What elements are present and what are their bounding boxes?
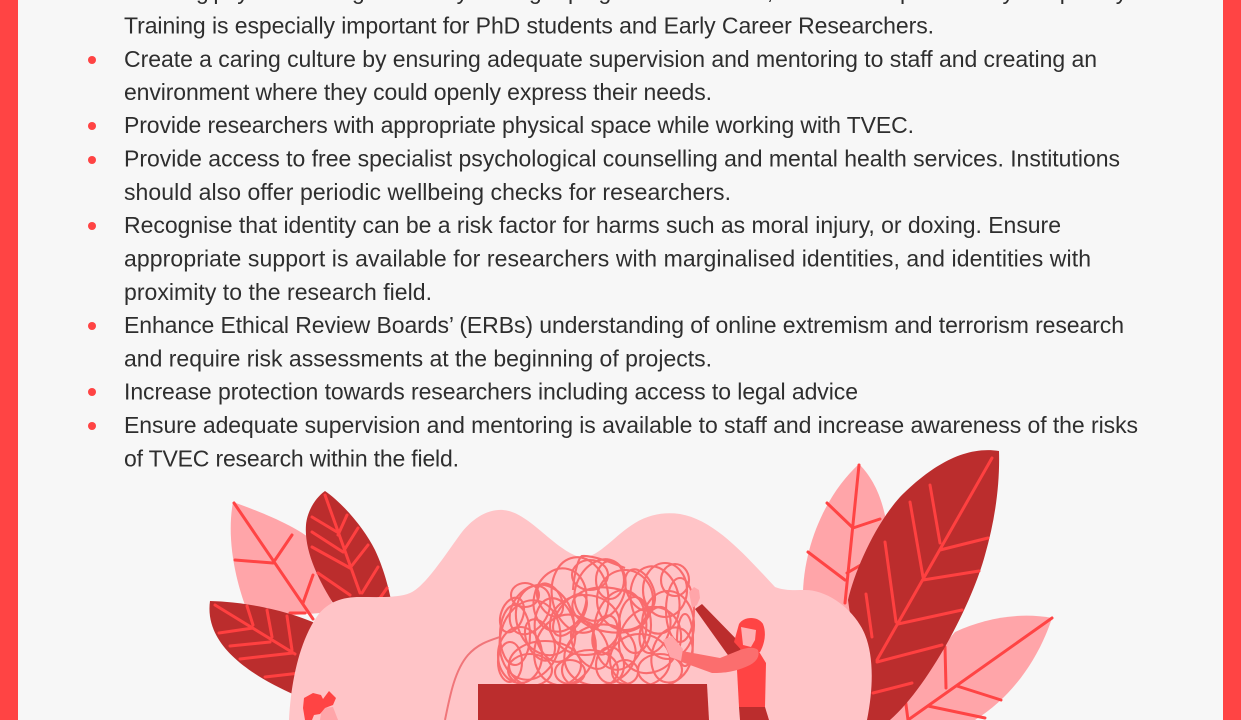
- leaf: large dark right: [848, 450, 999, 720]
- item: caring culture: environment where they could openly express their needs.: [124, 79, 712, 105]
- item: training (cropped top line): [124, 0, 1131, 38]
- background blob: [289, 510, 872, 720]
- leaf: light top right: [803, 464, 886, 612]
- face: [741, 627, 756, 647]
- item: identity risk: Recognise that identity can be a risk factor for harms such as moral injury, or doxing. Ensure: [124, 212, 1061, 238]
- right red border: [1223, 0, 1241, 720]
- item: supervision and awareness: Ensure adequate supervision and mentoring is available to staff and increase awareness of the risks: [124, 412, 1138, 438]
- item: counselling: Provide access to free specialist psychological counselling and mental health services. Institutions: [124, 146, 1120, 172]
- leaf: dark lower left: [209, 601, 315, 695]
- item: caring culture: Create a caring culture by ensuring adequate supervision and mentoring to staff and creating an: [124, 46, 1097, 72]
- recommendations list: [88, 0, 1138, 471]
- item: identity risk: proximity to the research field.: [124, 279, 432, 305]
- hair: [734, 618, 765, 654]
- item: supervision and awareness: [88, 412, 1138, 471]
- right figure untangling the thread: [663, 587, 769, 720]
- box: [478, 684, 709, 720]
- tangled ball of thread: [494, 551, 699, 694]
- item: counselling: should also offer periodic wellbeing checks for researchers.: [124, 179, 731, 205]
- leaf: light left: [231, 502, 335, 619]
- item: physical space: Provide researchers with appropriate physical space while working with TVEC.: [124, 112, 914, 138]
- item: ethical review boards: [88, 312, 1124, 371]
- thread: [445, 637, 500, 720]
- item: caring culture: [88, 46, 1097, 105]
- item: identity risk: [88, 212, 1091, 305]
- item: training (cropped top line): Training is especially important for PhD students and Early Career Researchers.: [124, 12, 934, 38]
- lower hand: [663, 636, 683, 661]
- item: ethical review boards: and require risk assessments at the beginning of projects.: [124, 345, 712, 371]
- item: counselling: [88, 146, 1120, 205]
- illustration: untangling a knot among leaves: [209, 450, 1052, 720]
- left figure (cropped hair and face): [303, 691, 338, 720]
- item: identity risk: appropriate support is available for researchers with marginalised identities, and identities with: [124, 246, 1091, 272]
- item: legal protection: Increase protection towards researchers including access to legal advice: [124, 379, 858, 405]
- lower arm: [679, 648, 759, 673]
- leaf: dark top left: [306, 491, 391, 606]
- left red border: [0, 0, 18, 720]
- item: supervision and awareness: of TVEC research within the field.: [124, 445, 459, 471]
- raised hand: [689, 587, 700, 608]
- raised arm: [695, 604, 744, 658]
- item: ethical review boards: Enhance Ethical Review Boards’ (ERBs) understanding of online extremism and terrorism research: [124, 312, 1124, 338]
- leaf: light lower right: [880, 616, 1052, 720]
- trousers: [739, 707, 769, 720]
- torso: [737, 650, 766, 707]
